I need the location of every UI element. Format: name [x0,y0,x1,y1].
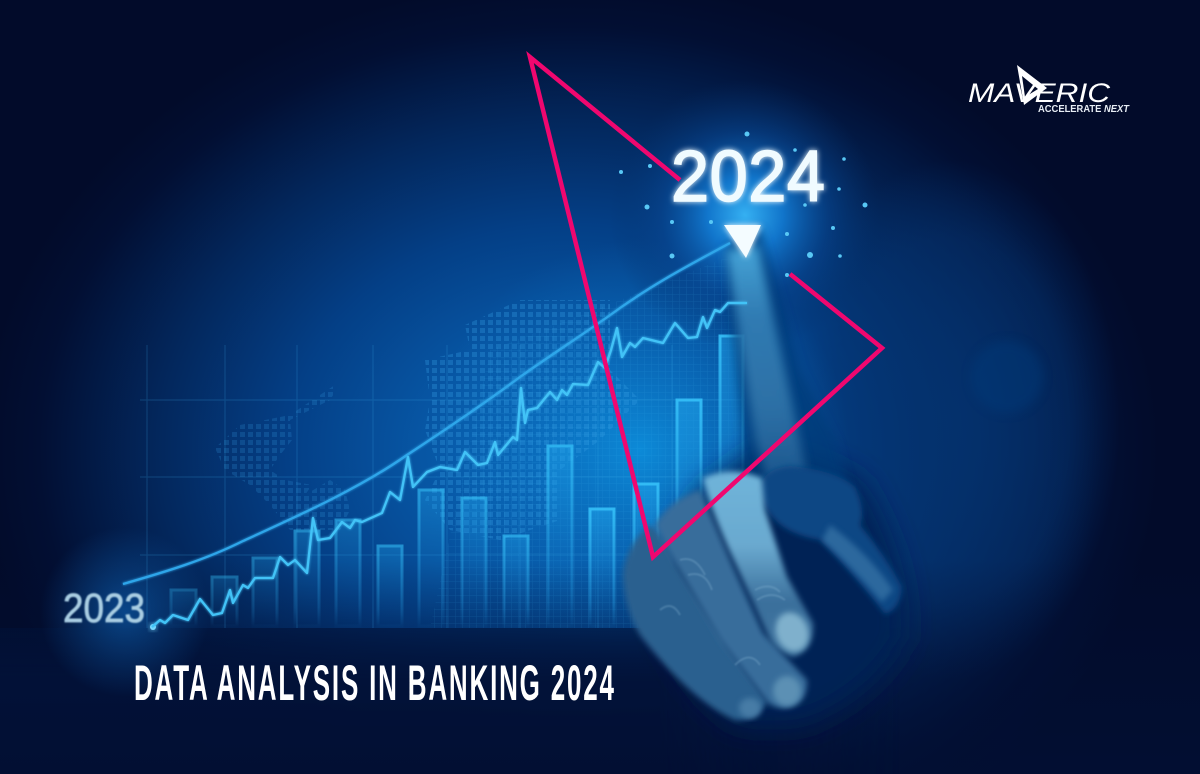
bar chart [171,336,743,626]
particles [619,132,868,277]
background: blurred second hand shapes [971,341,1043,413]
logo: Maveric [968,65,1130,115]
baseline [150,624,800,630]
logo wordmark: MAVERIC [968,78,1111,108]
hand: index finger [725,228,850,500]
hand [623,228,905,725]
growth curve [123,243,730,584]
year label 2023: 2023 [63,585,145,631]
dotted world map [215,300,640,540]
hand: ring finger [655,490,807,708]
logo tagline: ACCELERATE NEXT [1038,104,1130,115]
hand: little finger [623,525,767,720]
logo mark [1017,65,1047,105]
hand: knuckle creases [660,559,785,665]
chart grid [140,250,745,628]
hand: palm shadow [650,440,905,725]
pointer triangle [724,225,761,258]
pink outline triangle [530,57,882,557]
hand: fingernails [770,608,814,656]
title: DATA ANALYSIS IN BANKING 2024 [134,656,614,711]
hand: middle finger [703,472,813,657]
hand: thumb [760,466,902,614]
line series [152,303,747,627]
year label 2024: 2024 [671,135,825,216]
